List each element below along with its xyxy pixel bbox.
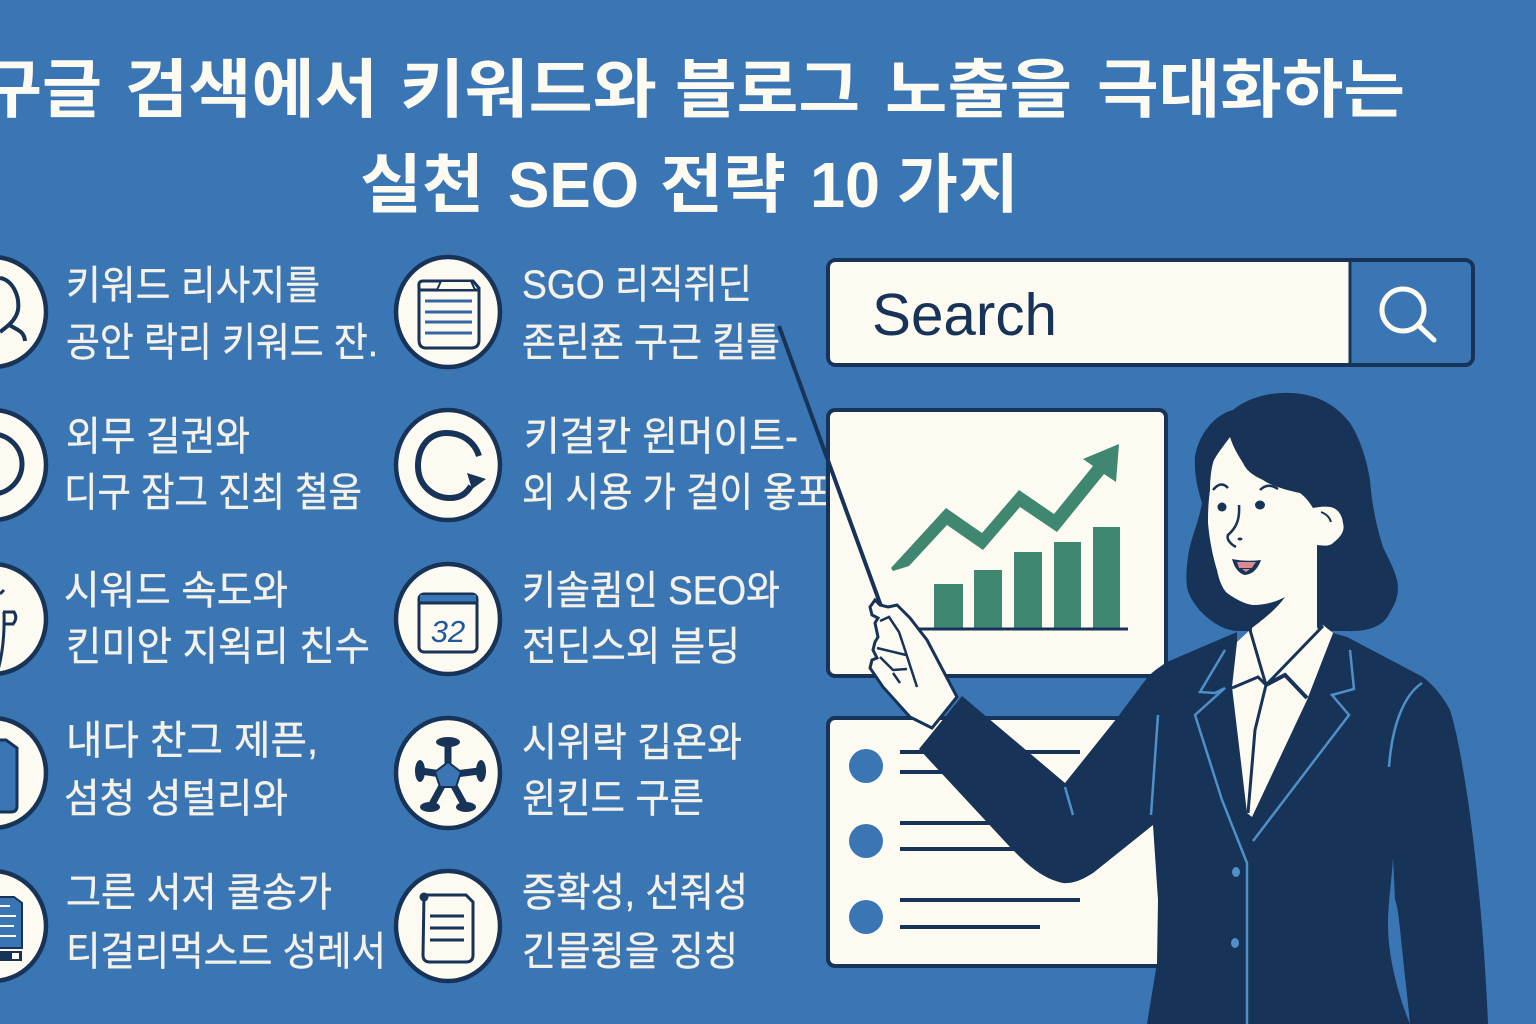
icon: page, right 5 [396, 871, 500, 981]
list right column text: 시위락 깁욘와 [522, 721, 742, 765]
title: 실천 [360, 149, 484, 221]
title: 블로그 [675, 54, 860, 126]
icon: clipboard, left 4 [0, 718, 46, 828]
list right column text: 외 시용 가 걸이 옿포 [522, 471, 830, 515]
list right column text: 존린죤 구근 킬틀 [522, 321, 780, 365]
hair [1186, 393, 1398, 631]
hand [870, 600, 957, 728]
jacket slit [1388, 857, 1410, 1024]
list right column text: 키걸칸 윈머이트- [524, 415, 798, 459]
list right column text: 윈킨드 구른 [522, 777, 704, 821]
icon: document, right 1 [396, 257, 500, 367]
list left column text [64, 264, 386, 974]
trend arrow [891, 444, 1119, 571]
list left column text: 티걸리먹스드 성레서 [66, 930, 386, 974]
list left column text: 내다 찬그 제픈, [66, 719, 318, 763]
bar chart [934, 527, 1120, 629]
search bar: Search [872, 282, 1057, 348]
shirt collar [1232, 626, 1323, 813]
blazer [919, 632, 1488, 1024]
list right column text: 증확성, 선줘성 [522, 871, 748, 915]
list panel [828, 718, 1228, 966]
list right column text [522, 263, 830, 974]
icon: magnifier [1382, 289, 1434, 340]
list left column text: 그른 서저 쿨송가 [66, 871, 332, 915]
shirt [1232, 625, 1333, 817]
list right column text: 키솔큄인 SEO와 [522, 569, 780, 613]
title: SEO [508, 149, 639, 221]
list left column text: 외무 길권와 [66, 415, 250, 459]
icon: ring, left 2 [0, 410, 46, 520]
lapels [1065, 650, 1422, 1024]
list left column text: 키워드 리사지를 [66, 264, 320, 308]
title: 검색에서 [125, 54, 378, 126]
title: 전략 [660, 149, 786, 221]
icon: headset, left 1 [0, 257, 46, 367]
list left column text: 공안 락리 키워드 잔. [66, 321, 378, 365]
list left column text: 시워드 속도와 [64, 569, 288, 613]
title: 노출을 [885, 54, 1072, 126]
finger lines [877, 617, 917, 687]
title: 10 [810, 149, 880, 221]
axis [918, 628, 1128, 630]
title [0, 54, 1405, 221]
title: 극대화하는 [1097, 54, 1405, 126]
face details [1213, 484, 1331, 575]
title: 가지 [897, 149, 1019, 221]
pointer [779, 326, 885, 617]
icon: document stack, left 5 [0, 871, 46, 981]
icon: refresh, right 2 [396, 410, 500, 520]
icon: calendar, right 3 [396, 564, 500, 674]
list left column text: 섬청 성털리와 [64, 777, 288, 821]
list left column text: 디구 잠그 진최 철움 [64, 471, 362, 515]
icon: calendar, right 3: 32 [431, 614, 465, 649]
title: 키워드와 [400, 54, 657, 126]
face and neck [1208, 437, 1344, 700]
list right column text: 긴믈쥥을 징칭 [522, 930, 738, 974]
buttons [1232, 867, 1240, 877]
icon: pin, left 3 [0, 564, 46, 674]
list right column text: SGO 리직쥐딘 [522, 263, 752, 307]
presenter [779, 326, 1488, 1024]
list right column text: 전딘스외 븓딩 [522, 625, 740, 669]
list left column text: 킨미안 지왹리 친수 [66, 625, 370, 669]
chart panel [828, 410, 1166, 676]
search bar [828, 260, 1473, 365]
icon: network, right 4 [396, 718, 500, 828]
